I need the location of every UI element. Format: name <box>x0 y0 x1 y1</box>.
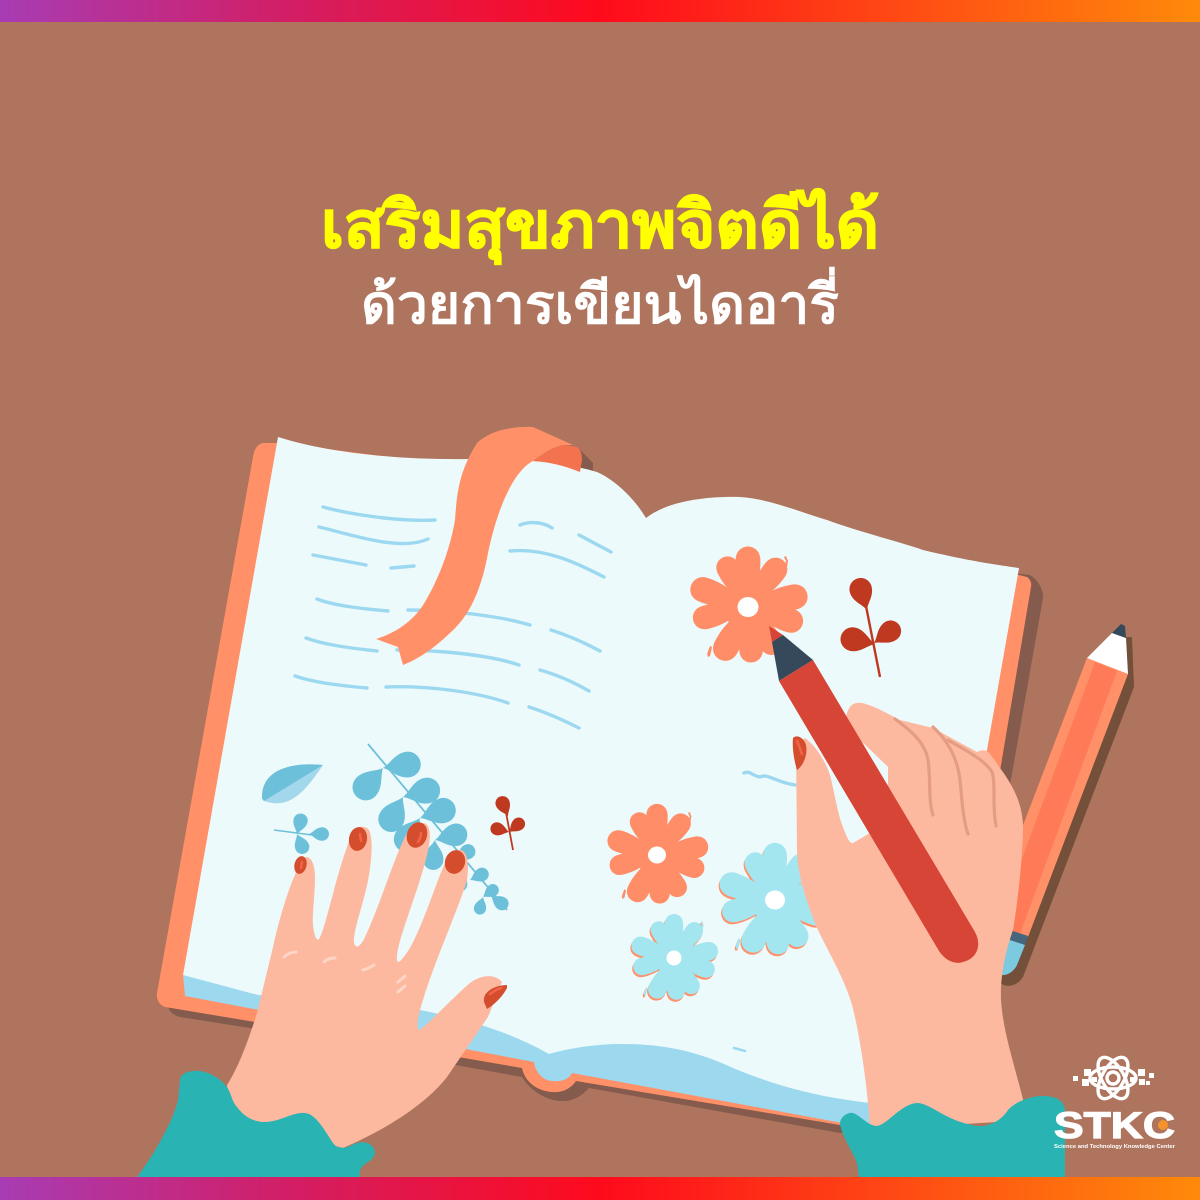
pencil <box>975 624 1134 986</box>
thumbnail <box>793 736 806 770</box>
book cover <box>157 443 1031 1135</box>
handwriting lines <box>295 507 795 1051</box>
hand shape <box>796 703 1028 1130</box>
nail highlights <box>301 833 501 994</box>
knuckle marks <box>284 952 405 992</box>
flower: large blue <box>715 843 834 959</box>
icon: blue sprig small <box>274 812 329 856</box>
pencil graphite <box>1112 624 1126 638</box>
pencil eraser <box>975 931 1025 975</box>
pencil center stripe <box>997 662 1117 934</box>
open book <box>157 437 1043 1135</box>
pen barrel <box>779 660 978 963</box>
right sleeve <box>840 1096 1065 1177</box>
atom mark <box>1090 1053 1136 1103</box>
pencil band <box>983 922 1028 945</box>
subtitle: ด้วยการเขียนไดอารี่ <box>361 267 839 335</box>
page edge <box>183 975 900 1130</box>
STKC logo <box>1054 1053 1176 1150</box>
pen tip <box>769 626 783 642</box>
left hand <box>227 820 507 1148</box>
pencil shadow <box>1000 637 1134 986</box>
thumbnail highlight <box>797 741 802 754</box>
flower center: top orange <box>738 597 758 617</box>
flower: top orange <box>687 546 810 665</box>
book shadow <box>168 450 1043 1135</box>
icon: blue leaf <box>262 764 323 803</box>
hand shape <box>227 823 502 1148</box>
pencil body <box>986 658 1128 937</box>
fingernails <box>293 820 507 1009</box>
title: เสริมสุขภาพจิตดีได้ <box>321 188 879 265</box>
pen <box>769 626 978 963</box>
pages <box>183 437 1019 1106</box>
icon: red sprig small <box>489 794 528 850</box>
icon: blue branch <box>347 744 511 916</box>
flower center: middle orange <box>648 846 666 864</box>
top gradient bar <box>0 0 1200 22</box>
flower: small blue <box>628 914 720 1004</box>
logo pixel squares <box>1073 1069 1154 1086</box>
finger creases <box>895 719 996 834</box>
ribbon bookmark <box>376 427 582 665</box>
pencil white tip <box>1087 633 1128 674</box>
logo tagline: Science and Technology Knowledge Center <box>1054 1144 1176 1150</box>
pen cone <box>772 635 813 681</box>
logo wordmark: STKC <box>1054 1105 1175 1146</box>
bookmark strip <box>376 427 573 665</box>
icon: red sprig top <box>838 575 905 677</box>
bottom gradient bar <box>0 1177 1200 1200</box>
right hand <box>793 703 1028 1130</box>
logo dot <box>1158 1120 1168 1130</box>
bookmark fold <box>533 445 582 472</box>
flower: middle orange <box>604 804 710 906</box>
left sleeve <box>137 1071 375 1177</box>
